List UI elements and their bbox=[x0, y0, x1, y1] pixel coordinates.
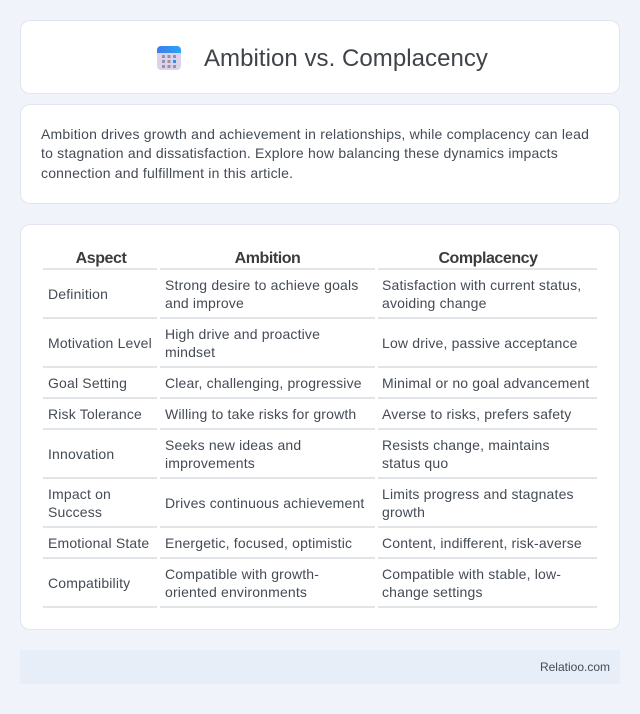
table rows: Emotional State bbox=[48, 535, 149, 551]
table header bbox=[76, 250, 538, 267]
panel: comparison table bbox=[20, 224, 620, 630]
panel: introduction bbox=[20, 104, 620, 204]
table rows: status quo bbox=[382, 455, 448, 471]
table header: Aspect bbox=[76, 250, 126, 267]
title: Ambition vs. Complacency bbox=[204, 45, 488, 72]
table rows: Content, indifferent, risk-averse bbox=[382, 535, 582, 551]
table rows: change settings bbox=[382, 584, 483, 600]
table rows: Strong desire to achieve goals bbox=[165, 277, 358, 293]
table header: Ambition bbox=[235, 250, 300, 267]
table rows: Willing to take risks for growth bbox=[165, 406, 356, 422]
table rows: High drive and proactive bbox=[165, 326, 320, 342]
icon: calendar bbox=[157, 46, 181, 70]
table rows: Motivation Level bbox=[48, 335, 152, 351]
intro text bbox=[41, 126, 589, 181]
table rows: Definition bbox=[48, 286, 108, 302]
intro text: to stagnation and dissatisfaction. Explore how balancing these dynamics impacts bbox=[41, 145, 558, 161]
table rows: improvements bbox=[165, 455, 255, 471]
table rows: Averse to risks, prefers safety bbox=[382, 406, 571, 422]
table rows: and improve bbox=[165, 295, 244, 311]
footer bar bbox=[20, 650, 620, 684]
table rows: Limits progress and stagnates bbox=[382, 486, 574, 502]
table rows: avoiding change bbox=[382, 295, 487, 311]
table rows: Energetic, focused, optimistic bbox=[165, 535, 352, 551]
table rows: Compatibility bbox=[48, 575, 130, 591]
table header: Complacency bbox=[438, 250, 538, 267]
intro text: Ambition drives growth and achievement in relationships, while complacency can lead bbox=[41, 126, 589, 142]
table rows: oriented environments bbox=[165, 584, 307, 600]
table rows: Risk Tolerance bbox=[48, 406, 142, 422]
table rows: Impact on bbox=[48, 486, 111, 502]
table rows: Drives continuous achievement bbox=[165, 495, 364, 511]
table rows: growth bbox=[382, 504, 425, 520]
intro text: connection and fulfillment in this article. bbox=[41, 165, 293, 181]
table rows: Low drive, passive acceptance bbox=[382, 335, 578, 351]
table rows: Satisfaction with current status, bbox=[382, 277, 581, 293]
table rows: Success bbox=[48, 504, 102, 520]
panel: title card bbox=[20, 20, 620, 94]
table rows: Clear, challenging, progressive bbox=[165, 375, 362, 391]
table rows: Goal Setting bbox=[48, 375, 127, 391]
table rows: Compatible with growth- bbox=[165, 566, 319, 582]
table rows: Innovation bbox=[48, 446, 114, 462]
table rows: mindset bbox=[165, 344, 215, 360]
table rows: Seeks new ideas and bbox=[165, 437, 301, 453]
table rows: Resists change, maintains bbox=[382, 437, 550, 453]
table rows: Compatible with stable, low- bbox=[382, 566, 561, 582]
table rows: Minimal or no goal advancement bbox=[382, 375, 589, 391]
footer credit: Relatioo.com bbox=[540, 660, 610, 674]
table rows bbox=[43, 268, 597, 608]
